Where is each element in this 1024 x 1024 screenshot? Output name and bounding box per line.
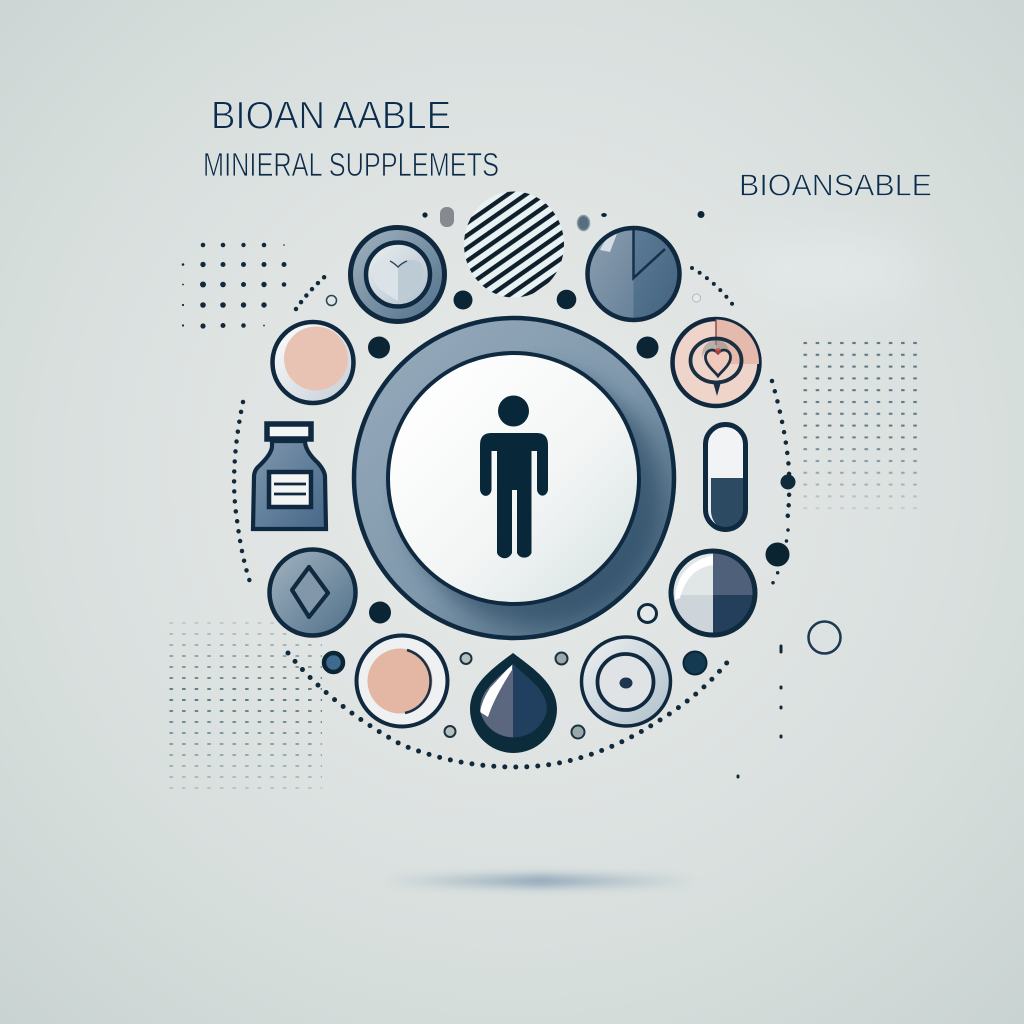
icon: striped circle xyxy=(464,192,564,298)
icon: heart target xyxy=(672,318,762,406)
side label: bioansable: BIOANSABLE xyxy=(739,168,932,202)
icon: peach circle top left xyxy=(272,322,354,403)
central hub xyxy=(354,318,674,638)
icon: heart ring xyxy=(350,228,444,322)
dotted orbit xyxy=(234,268,789,777)
icon: capsule xyxy=(705,424,746,532)
title: bioanaable: BIOAN AABLE xyxy=(211,94,451,138)
icon: supplement bottle xyxy=(253,424,326,529)
outer ring xyxy=(354,318,674,638)
icon: diamond coin xyxy=(270,550,356,636)
inner disc xyxy=(388,353,639,604)
icon: person xyxy=(480,396,548,558)
ground shadow xyxy=(385,876,695,886)
icon: water drop xyxy=(470,653,557,753)
dot grid: top left xyxy=(182,243,286,329)
subtitle: mineral supplements: MINIERAL SUPPLEMETS xyxy=(203,146,499,183)
icon: concentric target xyxy=(582,637,670,726)
dot grid: right xyxy=(803,342,918,510)
dot grid: lower left xyxy=(166,618,322,792)
icon: clock pie xyxy=(585,226,682,322)
icon: quartered circle xyxy=(671,551,755,637)
icon: peach button xyxy=(356,636,448,726)
connector dots xyxy=(324,207,840,738)
